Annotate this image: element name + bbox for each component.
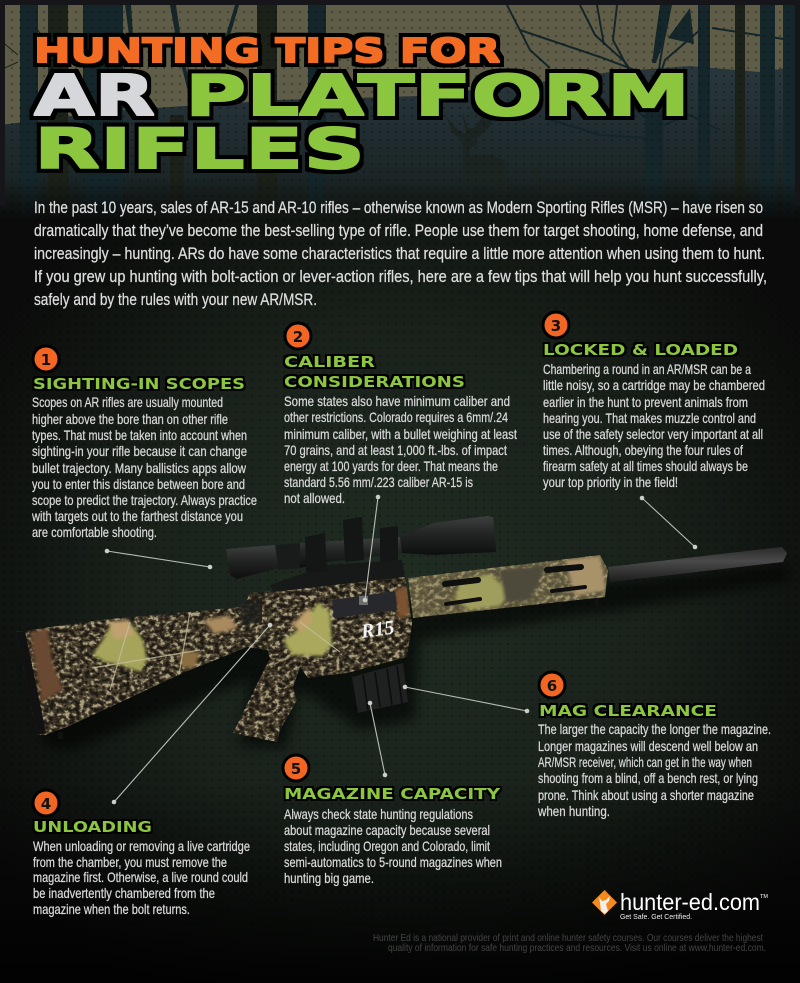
- panel: 4 unloading: be inadvertently chambered from the: [33, 886, 215, 901]
- panel: 5 magazine capacity: states, including Oregon and Colorado, limit: [284, 839, 490, 854]
- panel: 2 caliber considerations: minimum caliber, with a bullet weighing at least: [284, 427, 517, 442]
- panel: 1 sighting-in scopes: types. That must be taken into account when: [32, 428, 247, 443]
- logo: hunter-ed.com: TM: [760, 894, 768, 900]
- footer note: [373, 932, 766, 954]
- panel: 2 caliber considerations: Some states also have minimum caliber and: [284, 394, 510, 409]
- front pins: [558, 598, 599, 612]
- panel: 4 unloading: 4: [41, 795, 51, 813]
- icon: stag silhouette: [447, 113, 498, 158]
- panel: 1 sighting-in scopes: higher above the bore than on other rifle: [32, 412, 228, 427]
- panel: 2 caliber considerations: energy at 100 yards for deer. That means the: [284, 459, 498, 474]
- panel: 5 magazine capacity: semi-automatics to 5-round magazines when: [284, 855, 502, 870]
- optic rail: [270, 560, 405, 592]
- panel: 1 sighting-in scopes: bullet trajectory. Many ballistics apps allow: [32, 461, 246, 476]
- butt plate: [16, 631, 46, 735]
- panel: 5 magazine capacity: [283, 755, 502, 886]
- trigger guard: [305, 646, 350, 680]
- logo: hunter-ed.com: Get Safe. Get Certified.: [620, 912, 692, 921]
- title: [34, 31, 690, 181]
- panel: 1 sighting-in scopes: Scopes on AR rifles are usually mounted: [32, 395, 223, 410]
- buffer detail: [240, 598, 262, 625]
- logo: hunter-ed.com: hunter-ed.com: [620, 889, 760, 915]
- panel: 1 sighting-in scopes: are comfortable shooting.: [32, 525, 157, 540]
- panel: 1 sighting-in scopes: scope to predict the trajectory. Always practice: [32, 493, 257, 508]
- panel: 6 mag clearance: [537, 672, 771, 819]
- panel: 2 caliber considerations: 70 grains, and at least 1,000 ft.-lbs. of impact: [284, 443, 507, 458]
- panel: 2 caliber considerations: CONSIDERATIONS: [284, 373, 465, 391]
- panel: 4 unloading: When unloading or removing a live cartridge: [33, 839, 250, 854]
- panel: 4 unloading: UNLOADING: [33, 818, 152, 836]
- barrel: [608, 547, 787, 582]
- panel: 4 unloading: magazine first. Otherwise, a live round could: [33, 870, 248, 885]
- panel: 3 locked and loaded: times. Although, obeying the four rules of: [543, 443, 743, 458]
- camo body: [16, 555, 608, 742]
- leaf patches: [30, 555, 608, 702]
- panel: 5 magazine capacity: Always check state hunting regulations: [284, 807, 473, 822]
- panel: 5 magazine capacity: hunting big game.: [284, 871, 374, 886]
- intro paragraph: safely and by the rules with your new AR/MSR.: [34, 290, 317, 309]
- panel: 1 sighting-in scopes: with targets out to the farthest distance you: [31, 509, 243, 524]
- panel: 3 locked and loaded: firearm safety at all times should always be: [543, 459, 748, 474]
- rifle illustration: [16, 516, 790, 750]
- title: HUNTING TIPS FOR: [34, 31, 500, 70]
- leader lines: [105, 495, 697, 804]
- icon: doe silhouette: [529, 165, 577, 205]
- R15 mark: R15: [359, 617, 396, 643]
- panel: 4 unloading: [33, 790, 250, 917]
- panel: 5 magazine capacity: about magazine capacity because several: [284, 823, 490, 838]
- panel: 2 caliber considerations: CALIBER: [284, 353, 376, 371]
- panel: 1 sighting-in scopes: SIGHTING-IN SCOPES: [33, 375, 245, 393]
- intro paragraph: [34, 198, 767, 309]
- panel: 2 caliber considerations: [284, 323, 517, 506]
- icon: orange diamond with deer: [592, 890, 617, 915]
- panel: 6 mag clearance: 6: [547, 677, 557, 695]
- panel: 5 magazine capacity: 5: [291, 760, 301, 778]
- panel: 6 mag clearance: when hunting.: [537, 804, 610, 819]
- handguard vents: [445, 567, 585, 604]
- ejection port: [332, 591, 397, 618]
- panel: 3 locked and loaded: 3: [551, 317, 561, 335]
- panel: 3 locked and loaded: LOCKED & LOADED: [543, 341, 738, 359]
- scope: [226, 516, 496, 579]
- panel: 2 caliber considerations: not allowed.: [284, 491, 345, 506]
- panel: 3 locked and loaded: [543, 312, 765, 490]
- panel: 5 magazine capacity: MAGAZINE CAPACITY: [284, 785, 501, 803]
- panel: 3 locked and loaded: earlier in the hunt to prevent animals from: [543, 395, 748, 410]
- panel: 2 caliber considerations: 2: [293, 328, 303, 346]
- panel: 1 sighting-in scopes: you to enter this distance between bore and: [32, 477, 245, 492]
- stock sling pin: [58, 732, 63, 739]
- panel: 4 unloading: magazine when the bolt returns.: [33, 902, 190, 917]
- magazine: [352, 663, 408, 713]
- panel: 1 sighting-in scopes: [31, 346, 257, 540]
- panel: 1 sighting-in scopes: sighting-in your rifle because it can change: [32, 444, 247, 459]
- panel: 3 locked and loaded: your top priority in the field!: [543, 475, 678, 490]
- panel: 6 mag clearance: MAG CLEARANCE: [539, 702, 717, 720]
- logo: hunter-ed.com: [592, 889, 768, 921]
- title: PLATFORM: [185, 64, 690, 129]
- title: RIFLES: [34, 117, 365, 181]
- title: AR: [34, 64, 155, 129]
- panel: 2 caliber considerations: other restrictions. Colorado requires a 6mm/.24: [284, 410, 508, 425]
- panel: 1 sighting-in scopes: 1: [41, 351, 51, 369]
- panel: 4 unloading: from the chamber, you must remove the: [33, 855, 227, 870]
- panel: 2 caliber considerations: standard 5.56 mm/.223 caliber AR-15 is: [284, 475, 473, 490]
